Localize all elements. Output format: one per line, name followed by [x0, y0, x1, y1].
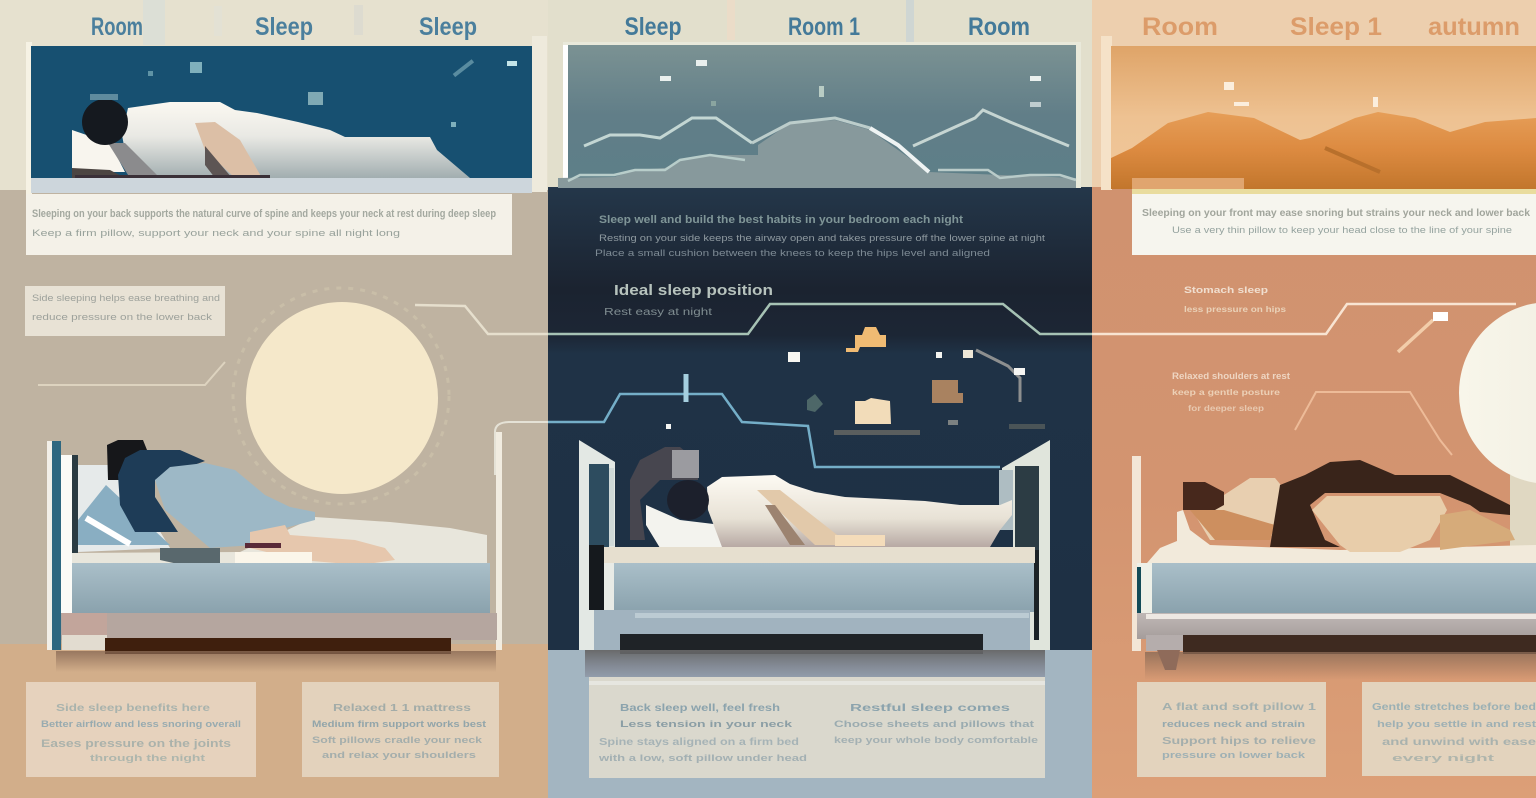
text block: column 3 note A — [1184, 285, 1287, 314]
text block: column 3 note B — [1172, 371, 1290, 413]
text box: column 3 left: pressure on lower back — [1162, 750, 1306, 760]
text box: column 2: Restful sleep comes — [850, 703, 1011, 714]
illustration: bed with back sleeper — [579, 440, 1050, 677]
text block: intro 1: Sleeping on your back supports the natural curve of spine and keeps your neck at rest during deep sleep — [32, 208, 496, 220]
heading: column 2 sub-heading: Rest easy at night — [604, 307, 712, 318]
heading row: column 3: autumn — [1428, 13, 1520, 41]
panel: sunrise hills — [1101, 36, 1536, 194]
text box: column 1 left: through the night — [90, 753, 205, 763]
text block: intro 1: Keep a firm pillow, support your neck and your spine all night long — [32, 228, 400, 238]
icon: sleeping figure front view — [72, 94, 470, 178]
text box: column 3 right: every night — [1392, 753, 1494, 763]
heading row: column 1: Sleep — [255, 13, 313, 41]
heading row: column 2: Room 1 — [788, 13, 860, 41]
panel: column 2 background — [548, 0, 1092, 798]
icon: sun column 3 — [1459, 302, 1536, 565]
panel: night sky with sleeper — [26, 36, 547, 194]
text block: column 3 note A: less pressure on hips — [1184, 305, 1287, 314]
heading row: column 2 — [624, 13, 1030, 41]
text box: column 3 right: Gentle stretches before bed — [1372, 702, 1536, 713]
text box: column 3 left — [1137, 682, 1326, 777]
heading: column 2 sub-heading — [604, 282, 773, 318]
icons: floating objects — [666, 327, 1045, 435]
heading row: column 2: Sleep — [624, 13, 682, 41]
text box: column 2: Choose sheets and pillows that — [834, 719, 1034, 729]
text box: column 1 left: Better airflow and less snoring overall — [41, 719, 241, 729]
text block: side note: reduce pressure on the lower back — [32, 312, 213, 322]
text block: column 3 intro — [1132, 194, 1536, 255]
heading row: column 1: Room — [91, 13, 143, 41]
text block: intro 2: Resting on your side keeps the airway open and takes pressure off the lower spine at night — [599, 233, 1046, 243]
icon: sun column 1 — [233, 288, 449, 504]
text block: intro 2 — [595, 214, 1046, 258]
illustration: bed with front sleeper — [1132, 456, 1536, 680]
heading row: column 3 — [1142, 13, 1520, 41]
text box: column 3 left: reduces neck and strain — [1162, 719, 1305, 729]
text block: column 3 note B: keep a gentle posture — [1172, 388, 1281, 397]
text box: column 3 right: help you settle in and rest — [1377, 719, 1536, 729]
heading row: column 1 — [91, 13, 477, 41]
panel: column 3 background — [1092, 0, 1536, 798]
text block: intro 1 — [26, 194, 512, 255]
text box: column 1 right: Relaxed 1 1 mattress — [333, 703, 472, 714]
text box: column 2 — [589, 677, 1045, 778]
text block: intro 2: Sleep well and build the best habits in your bedroom each night — [599, 214, 963, 226]
text box: column 2: Back sleep well, feel fresh — [620, 703, 780, 714]
text block: column 3 note B: Relaxed shoulders at rest — [1172, 371, 1290, 381]
text block: column 3 intro: Use a very thin pillow to keep your head close to the line of your spine — [1172, 225, 1512, 235]
text block: column 3 note A: Stomach sleep — [1184, 285, 1269, 295]
heading row: column 3: Room — [1142, 13, 1218, 41]
heading row: column 3: Sleep 1 — [1290, 13, 1382, 41]
heading row: column 2: Room — [968, 13, 1030, 41]
callout lines — [38, 304, 1516, 475]
text block: column 3 intro: Sleeping on your front may ease snoring but strains your neck and lower back — [1142, 208, 1530, 219]
text box: column 3 right — [1362, 682, 1536, 776]
text box: column 1 left — [26, 682, 256, 777]
text box: column 2: keep your whole body comfortable — [834, 735, 1038, 745]
text box: column 1 right: Soft pillows cradle your neck — [312, 735, 483, 745]
text box: column 3 left: Support hips to relieve — [1162, 736, 1317, 747]
heading: column 2 sub-heading: Ideal sleep position — [614, 282, 773, 299]
text box: column 1 left: Side sleep benefits here — [56, 703, 211, 714]
text block: side note: Side sleeping helps ease breathing and — [32, 293, 220, 303]
text box: column 1 right — [302, 682, 499, 777]
text box: column 2: Less tension in your neck — [620, 719, 794, 729]
text box: column 3 right: and unwind with ease — [1382, 737, 1536, 748]
text box: column 1 right: Medium firm support works best — [312, 719, 486, 729]
text box: column 1 right: and relax your shoulders — [322, 750, 476, 760]
text block: intro 2: Place a small cushion between the knees to keep the hips level and aligned — [595, 248, 990, 258]
icon: sleeper — [1183, 460, 1515, 552]
panel: column 1 background — [0, 0, 548, 798]
panel: twilight mountains — [558, 42, 1081, 188]
illustration: bed with side sleeper — [47, 432, 502, 672]
text box: column 2: Spine stays aligned on a firm bed — [599, 737, 799, 748]
heading row: column 1: Sleep — [419, 13, 477, 41]
text box: column 1 left: Eases pressure on the joints — [41, 738, 231, 750]
text block: side note — [25, 286, 225, 336]
text block: column 3 note B: for deeper sleep — [1188, 404, 1264, 413]
text box: column 2: with a low, soft pillow under head — [598, 753, 807, 763]
icon: sleeper — [107, 440, 395, 570]
text box: column 3 left: A flat and soft pillow 1 — [1162, 702, 1317, 713]
icon: sleeper — [646, 475, 1012, 548]
